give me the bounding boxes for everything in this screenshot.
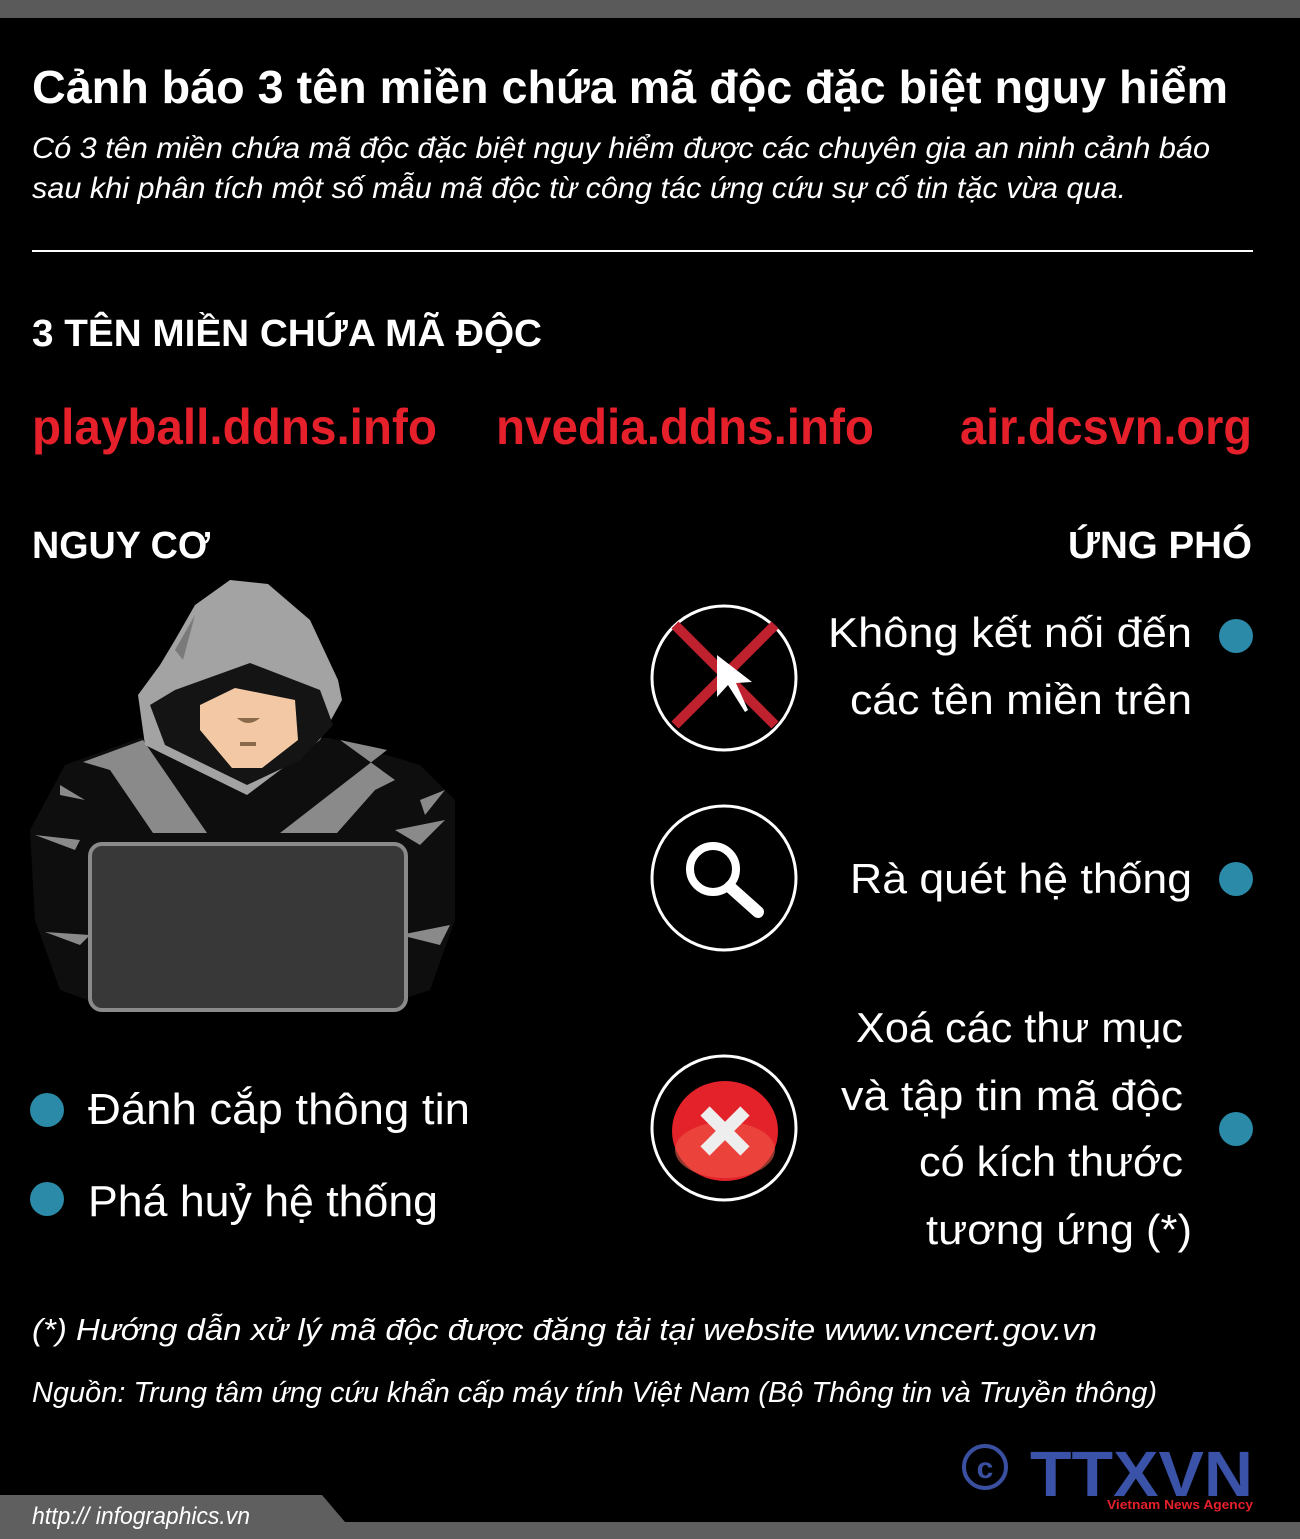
logo: TTXVN: TTXVN — [1030, 1438, 1253, 1510]
subtitle: sau khi phân tích một số mẫu mã độc từ công tác ứng cứu sự cố tin tặc vừa qua. — [32, 172, 1126, 205]
title: Cảnh báo 3 tên miền chứa mã độc đặc biệt nguy hiểm — [32, 61, 1228, 113]
footnote: (*) Hướng dẫn xử lý mã độc được đăng tải tại website www.vncert.gov.vn — [32, 1312, 1097, 1347]
heading: ung pho: ỨNG PHÓ — [1068, 523, 1252, 567]
bullet: danh cap thong tin: Đánh cắp thông tin — [88, 1085, 470, 1134]
icon: magnifier — [652, 806, 796, 950]
dot 1 — [1219, 619, 1253, 653]
footer bar: http:// infographics.vn — [32, 1503, 250, 1530]
dot 2 — [1219, 862, 1253, 896]
response 1 text: các tên miền trên — [850, 676, 1192, 723]
icon: blocked cursor — [652, 606, 796, 750]
subtitle — [32, 132, 1210, 205]
icon: delete button — [652, 1056, 796, 1200]
response 1 text: Không kết nối đến — [828, 609, 1192, 656]
bullet: pha huy he thong: Phá huỷ hệ thống — [88, 1177, 438, 1226]
response 3 text: Xoá các thư mục — [856, 1004, 1183, 1051]
domain list: nvedia.ddns.info — [496, 399, 874, 455]
response 3 text: và tập tin mã độc — [841, 1072, 1183, 1119]
response 3 text: có kích thước — [919, 1138, 1183, 1185]
section heading: domains: 3 TÊN MIỀN CHỨA MÃ ĐỘC — [32, 310, 542, 355]
dot 3 — [1219, 1112, 1253, 1146]
source: Nguồn: Trung tâm ứng cứu khẩn cấp máy tính Việt Nam (Bộ Thông tin và Truyền thông) — [32, 1377, 1157, 1409]
response 3 text: tương ứng (*) — [926, 1206, 1192, 1253]
logo: TTXVN: Vietnam News Agency — [1107, 1497, 1254, 1512]
domain list: air.dcsvn.org — [960, 399, 1252, 455]
domain list — [32, 399, 1252, 455]
subtitle: Có 3 tên miền chứa mã độc đặc biệt nguy hiểm được các chuyên gia an ninh cảnh báo — [32, 132, 1210, 165]
footer bar — [0, 1495, 1300, 1539]
domain list: playball.ddns.info — [32, 399, 437, 455]
response 2 text: Rà quét hệ thống — [850, 855, 1192, 902]
logo: TTXVN: c — [977, 1452, 993, 1485]
response 1 text — [828, 609, 1192, 723]
response 3 text — [841, 1004, 1192, 1253]
hacker illustration — [30, 580, 455, 1010]
heading: nguy co: NGUY CƠ — [32, 525, 211, 567]
